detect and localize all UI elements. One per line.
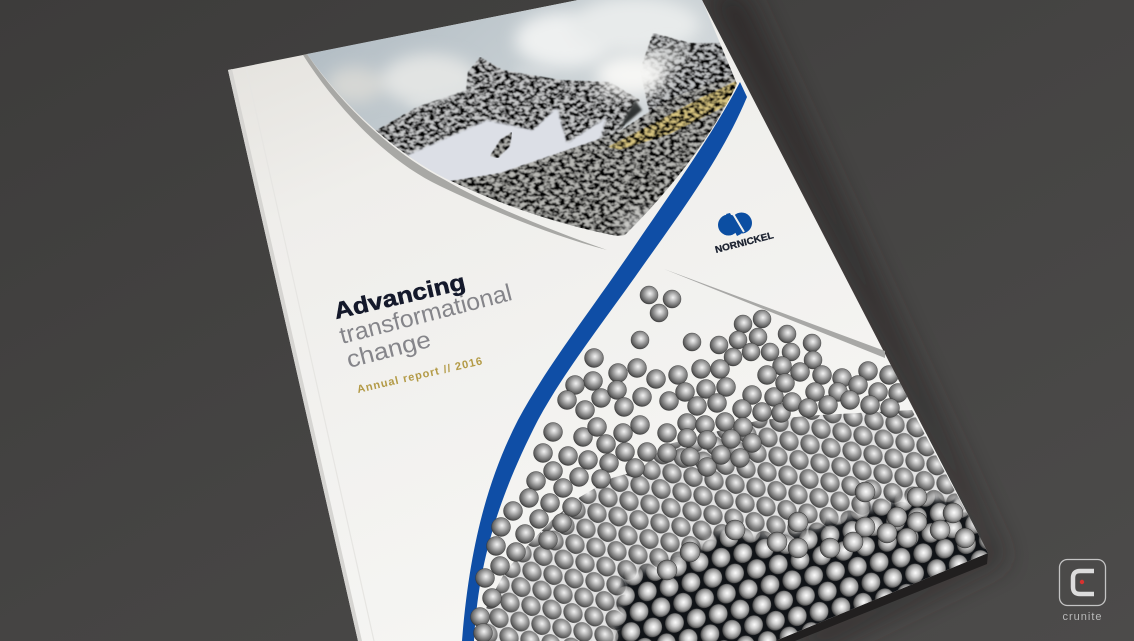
- icon: N mark: [718, 212, 752, 236]
- icon: crunite badge: [1060, 560, 1106, 606]
- bright spheres on dark boundary: [657, 482, 975, 580]
- subtitle: transformational: transformational: [337, 279, 515, 350]
- dark dense spheres at bottom: [609, 491, 988, 641]
- report label: Annual report // 2016: [356, 355, 483, 396]
- blue swoosh band: [462, 82, 747, 641]
- dense sphere lattice: [480, 410, 988, 641]
- book cover page: [228, 0, 988, 641]
- rock patches in snow: [490, 132, 512, 158]
- snow field: [400, 107, 607, 184]
- mist over left mountain: [414, 72, 548, 110]
- right mountain: [642, 33, 735, 112]
- spine edge: [228, 67, 374, 641]
- sun flare and fog: [596, 46, 690, 237]
- book shadow: [702, 0, 1005, 641]
- foreground rock: [445, 72, 740, 240]
- grey line above spheres: [664, 269, 885, 358]
- subtitle: change: change: [344, 326, 434, 374]
- clouds: [327, 0, 700, 106]
- dark shadow wedge: [620, 100, 642, 128]
- moss band: [607, 80, 738, 150]
- book: thickness of lower edge: [775, 553, 988, 641]
- spheres field: [470, 286, 1020, 641]
- grey curve around photo: [303, 54, 607, 250]
- logo: crunite watermark: [1060, 560, 1106, 623]
- left mountain: [372, 57, 640, 158]
- crunite wordmark: crunite: [1062, 611, 1103, 623]
- panel: mountain photograph: [300, 0, 750, 240]
- title: Advancing: Advancing: [331, 268, 468, 324]
- scattered spheres: [470, 286, 908, 641]
- logo: Nornickel: [714, 212, 775, 256]
- logo wordmark: NORNICKEL: [714, 230, 775, 256]
